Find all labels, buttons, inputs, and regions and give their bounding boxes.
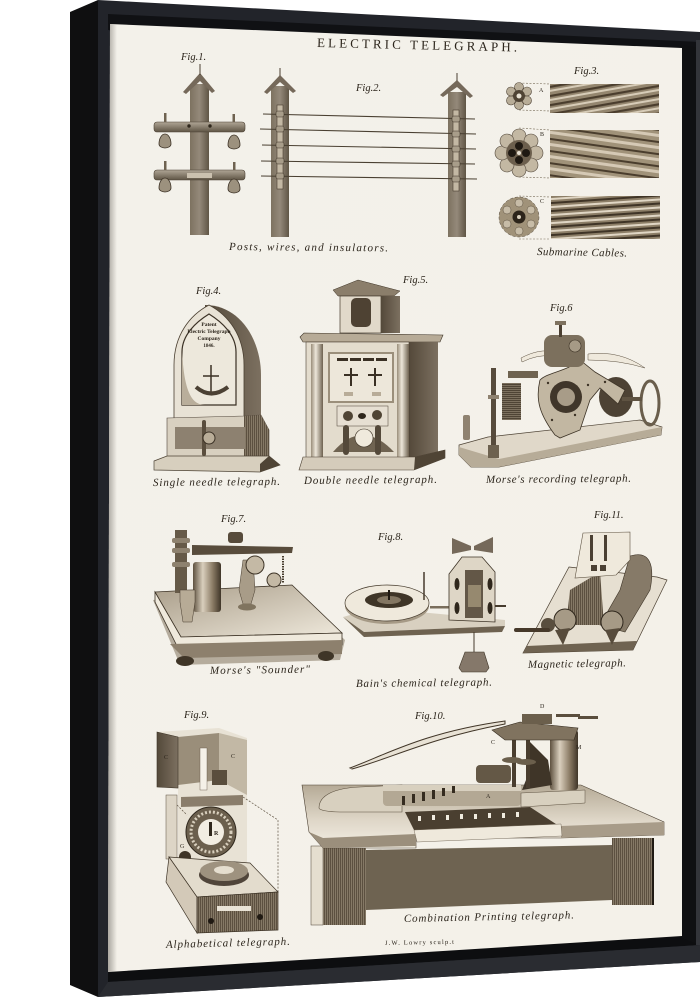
keyboard xyxy=(405,807,562,842)
table body xyxy=(311,838,654,925)
figure 3: submarine cables xyxy=(495,66,660,260)
figure 9: alphabetical telegraph: G xyxy=(180,844,185,850)
figure 9: alphabetical telegraph: R xyxy=(214,831,219,837)
figure 2: posts and wires xyxy=(228,68,477,254)
figure 4: single needle telegraph xyxy=(154,286,280,472)
figure 4: single needle telegraph: 1846. xyxy=(203,344,215,349)
dials xyxy=(337,358,387,386)
figure 3: submarine cables: Submarine Cables. xyxy=(537,246,627,260)
figure 7: Morse's Sounder xyxy=(153,514,345,677)
figure 11: magnetic telegraph xyxy=(514,510,667,671)
title: ELECTRIC TELEGRAPH. xyxy=(317,35,517,55)
caption row 1: Single needle telegraph. xyxy=(153,476,280,489)
printing mechanism xyxy=(492,714,598,790)
figure 9: alphabetical telegraph: C xyxy=(231,754,235,760)
cable B section xyxy=(495,129,543,177)
figure 10: combination printing telegraph: Fig.10. xyxy=(414,711,445,722)
figure 10: combination printing telegraph: M xyxy=(576,745,582,751)
cable A section xyxy=(506,82,532,110)
figure 7: Morse's Sounder: Fig.7. xyxy=(220,514,246,525)
figure 3: submarine cables: A xyxy=(539,88,544,94)
figure 5: double needle telegraph xyxy=(299,275,445,470)
figure 9: alphabetical telegraph: C xyxy=(164,755,168,761)
figure 3: submarine cables: C xyxy=(540,199,544,205)
figure 11: magnetic telegraph: Fig.11. xyxy=(593,510,624,521)
caption row 1: Double needle telegraph. xyxy=(303,474,437,487)
figure 1: post with insulators xyxy=(154,52,245,235)
paper strip xyxy=(350,721,505,769)
cylinder xyxy=(383,785,521,806)
caption row 1 xyxy=(153,473,631,489)
cable C section xyxy=(499,197,539,237)
figure 5: double needle telegraph: Fig.5. xyxy=(402,275,428,286)
figure 10: combination printing telegraph: C xyxy=(491,740,495,746)
figure 11: magnetic telegraph: Magnetic telegraph. xyxy=(527,657,626,671)
figure 10: combination printing telegraph xyxy=(302,704,664,925)
figure 2: posts and wires: Fig.2. xyxy=(355,83,381,94)
figure 9: alphabetical telegraph: Fig.9. xyxy=(183,710,209,721)
figure 8: Bain's chemical telegraph: Fig.8. xyxy=(377,532,403,543)
figure 7: Morse's Sounder: Morse's "Sounder" xyxy=(209,664,310,677)
figure 1: post with insulators: Fig.1. xyxy=(180,52,206,63)
figure 3: submarine cables: B xyxy=(540,132,544,138)
figure 10: combination printing telegraph: D xyxy=(540,704,545,710)
figure 6: Morse's recording telegraph: Fig.6 xyxy=(549,303,573,314)
figure 8: Bain's chemical telegraph: Bain's chemical telegraph. xyxy=(356,677,492,690)
dial lettering: Patent xyxy=(201,322,217,328)
figure 9: alphabetical telegraph xyxy=(157,710,290,951)
figure 6: Morse's recording telegraph xyxy=(459,303,662,467)
paper xyxy=(108,24,682,972)
caption row 1: Morse's recording telegraph. xyxy=(485,473,631,486)
figure 3: submarine cables: Fig.3. xyxy=(573,66,599,77)
figure 8: Bain's chemical telegraph xyxy=(343,532,506,690)
figure 10: combination printing telegraph: A xyxy=(486,794,491,800)
figure 4: single needle telegraph: Company xyxy=(198,336,221,342)
figure 4: single needle telegraph: Electric Telegraph xyxy=(187,329,231,335)
table top xyxy=(302,785,664,848)
figure 2: posts and wires: Posts, wires, and insulators. xyxy=(228,241,388,254)
figure 4: single needle telegraph: Fig.4. xyxy=(195,286,221,297)
engraver credit: J.W. Lowry sculp.t xyxy=(385,939,454,947)
figure 9: alphabetical telegraph: Alphabetical telegraph. xyxy=(165,936,290,951)
figure 10: combination printing telegraph: Combination Printing telegraph. xyxy=(404,909,574,925)
